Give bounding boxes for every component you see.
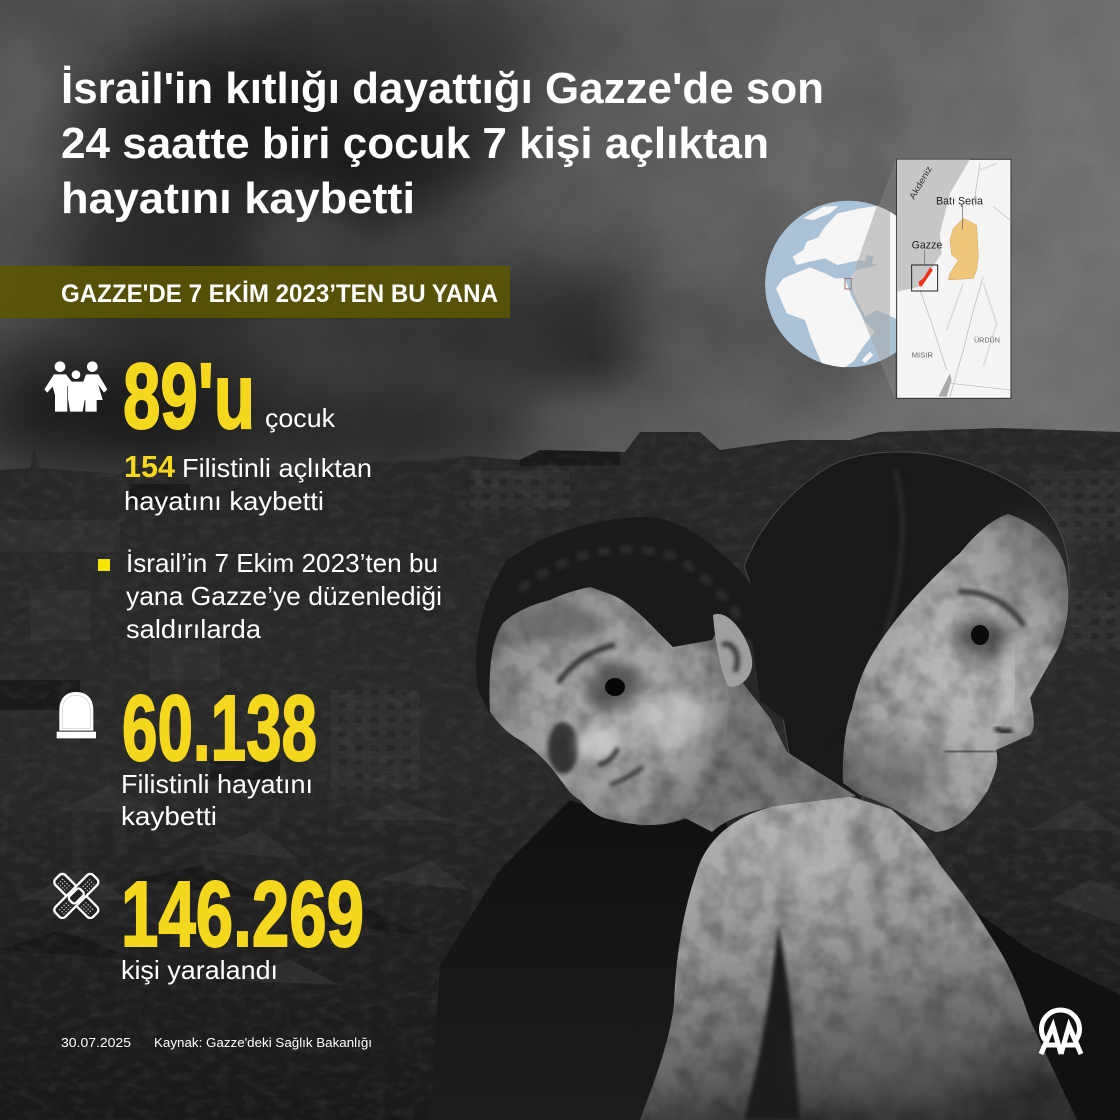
stat: children [44, 344, 336, 448]
icon: gravestone [57, 693, 96, 738]
logo: AA [1041, 1010, 1081, 1054]
figure: child's ear [713, 614, 752, 687]
bullet text: attacks [98, 548, 442, 644]
inset panel: Akdeniz [907, 164, 934, 201]
unit: çocuk [265, 403, 336, 433]
footer: date and source: 30.07.2025 [61, 1035, 131, 1050]
bullet text: attacks: saldırılarda [126, 614, 262, 644]
background: smoke sky [0, 0, 1120, 520]
title [61, 64, 824, 223]
figure: child's face [480, 570, 730, 825]
bullet text: attacks: yana Gazze’ye düzenlediği [126, 581, 442, 611]
icon: family [44, 361, 107, 412]
footer: date and source [61, 1035, 372, 1050]
label: Filistinli hayatını [121, 769, 313, 799]
stat: deaths [57, 676, 317, 831]
beam outside globe [851, 159, 896, 398]
locator map: globe and inset [765, 159, 1011, 398]
footer: date and source: Kaynak: Gazze'deki Sağlık Bakanlığı [154, 1035, 372, 1050]
figure: mother's face [843, 514, 1068, 832]
background: destroyed city and tents [0, 420, 1120, 1120]
title: 24 saatte biri çocuk 7 kişi açlıktan [61, 119, 769, 168]
bullet text: attacks: İsrail’in 7 Ekim 2023’ten bu [126, 548, 438, 578]
inset panel: Batı Şeria [936, 195, 984, 207]
banner: date range [0, 266, 510, 318]
banner: date range: GAZZE'DE 7 EKİM 2023’TEN BU YANA [61, 280, 498, 308]
stat: starvation deaths: Filistinli açlıktan [182, 453, 372, 483]
figure: child's neck [683, 650, 856, 832]
inset panel: MISIR [912, 352, 933, 359]
globe [765, 200, 896, 368]
figure: child's hair [476, 517, 806, 725]
number: 89'u [123, 344, 255, 448]
label: kaybetti [121, 801, 217, 831]
number: 146.269 [121, 862, 364, 966]
title: hayatını kaybetti [61, 174, 415, 223]
inset panel: Gazze [912, 239, 942, 251]
figure: child's torso and arm [640, 796, 1077, 1120]
number: 60.138 [122, 676, 317, 780]
stat: starvation deaths: hayatını kaybetti [124, 486, 324, 516]
figure: mother's headscarf and torso [430, 452, 1120, 1120]
label [121, 769, 313, 831]
stat: starvation deaths: 154 [124, 449, 176, 484]
label: kişi yaralandı [121, 955, 278, 985]
inset panel [897, 159, 1011, 398]
inset panel: ÜRDÜN [974, 337, 1000, 345]
stat: starvation deaths [124, 449, 372, 516]
title: İsrail'in kıtlığı dayattığı Gazze'de son [61, 64, 824, 113]
stat: wounded [53, 862, 364, 985]
icon: bandages [53, 872, 100, 920]
